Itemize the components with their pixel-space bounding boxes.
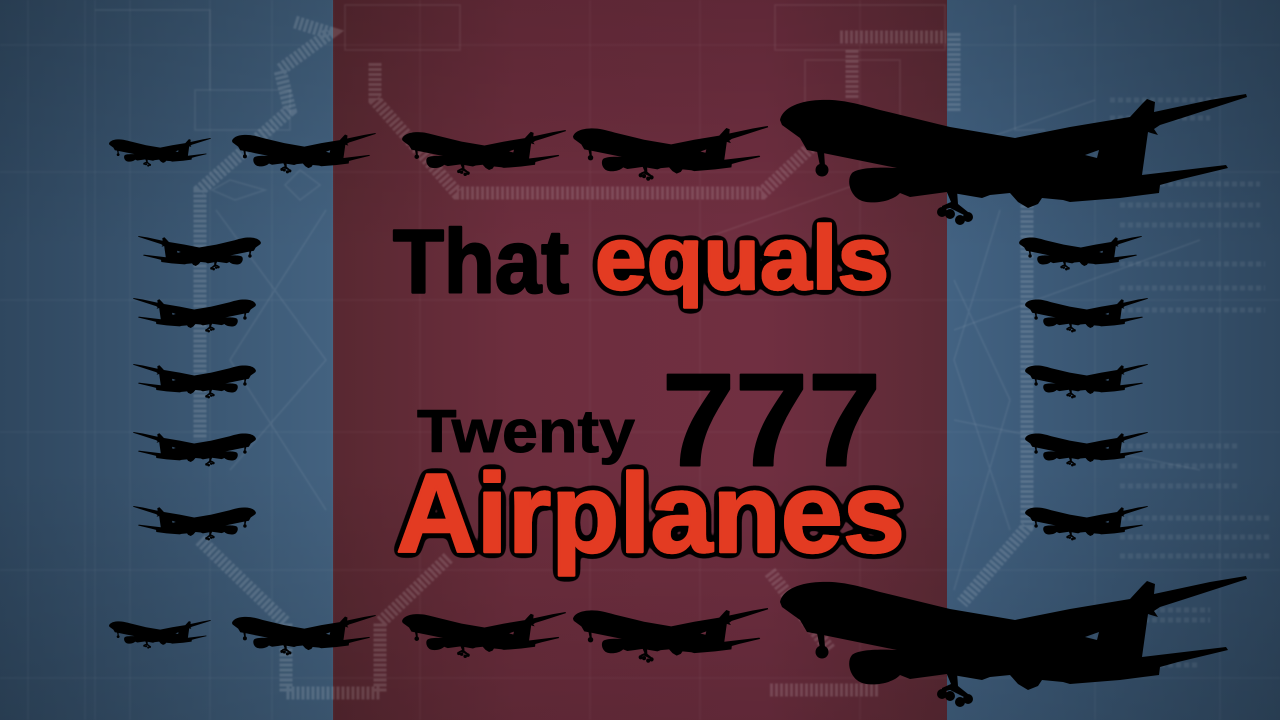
plane column: left: [133, 236, 261, 540]
icon: large plane top: [780, 94, 1247, 225]
panel: central red background: [333, 0, 947, 720]
heading: Airplanes: Airplanes: [396, 451, 905, 576]
panel: right blue background: [947, 0, 1280, 720]
icon: plane left 5: [133, 506, 256, 540]
text: 777: 777: [662, 346, 881, 494]
icon: plane right 4: [1025, 432, 1148, 466]
icon: plane bottom 1: [109, 620, 211, 649]
heading: equals: equals: [595, 209, 889, 309]
icon: plane bottom 4: [573, 608, 768, 663]
icon: plane top 4: [573, 126, 768, 181]
plane column: right: [1019, 236, 1148, 540]
icon: plane bottom 2: [232, 615, 376, 655]
text: Twenty: Twenty: [417, 398, 636, 465]
icon: plane left 2: [133, 298, 256, 332]
icon: plane left 4: [133, 432, 256, 466]
icon: plane bottom 3: [402, 612, 566, 658]
icon: plane right 5: [1025, 506, 1148, 540]
icon: plane left 3: [133, 364, 256, 398]
icon: plane top 1: [109, 138, 211, 167]
icon: plane right 2: [1025, 298, 1148, 332]
icon: plane right 3: [1025, 364, 1148, 398]
icon: plane top 2: [232, 133, 376, 173]
panel: left blue background: [0, 0, 333, 720]
plane row: top: [109, 94, 1247, 225]
heading: That: That: [393, 212, 569, 312]
icon: plane left 1: [138, 236, 261, 270]
plane row: bottom: [109, 576, 1247, 707]
icon: large plane bottom: [780, 576, 1247, 707]
icon: plane top 3: [402, 130, 566, 176]
icon: plane right 1: [1019, 236, 1142, 270]
